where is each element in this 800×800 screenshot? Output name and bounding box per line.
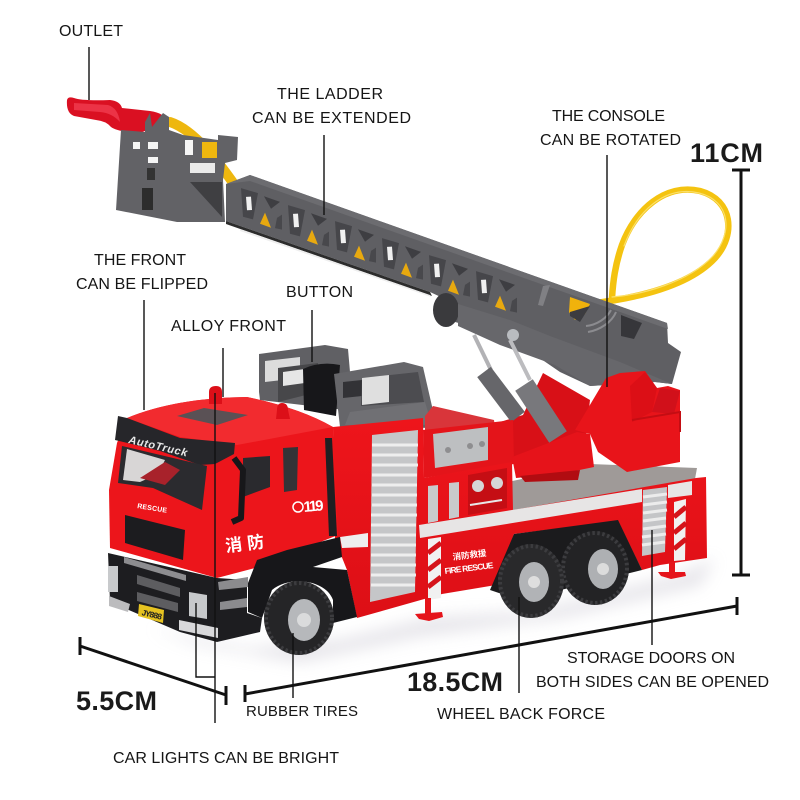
callout: alloy front: ALLOY FRONT — [171, 318, 286, 335]
ladder beam — [226, 175, 681, 386]
rear rail on cab — [259, 345, 350, 410]
deck grating — [425, 406, 495, 432]
dimension: width 5.5CM — [76, 637, 226, 716]
callout: wheel back force: WHEEL BACK FORCE — [437, 706, 605, 723]
rear grey deck — [508, 464, 697, 512]
side lettering: FIRE RESCUE — [444, 560, 494, 576]
callout: ladder — [252, 86, 411, 127]
wing mirror — [232, 458, 243, 522]
basket frame — [116, 113, 238, 222]
ladder truss openings — [226, 187, 517, 315]
license plate: JY888 — [140, 608, 163, 623]
side lettering: 消防救援 — [452, 548, 487, 562]
cab rear black strip — [325, 438, 337, 536]
license plate — [138, 604, 164, 623]
headlights — [108, 566, 207, 619]
ladder rear openings — [538, 285, 642, 339]
basket openings — [133, 140, 222, 217]
control panel — [433, 427, 488, 468]
small silver doors — [428, 482, 459, 523]
black visor — [115, 416, 235, 465]
hinge block — [433, 293, 459, 327]
black round button — [303, 364, 340, 416]
callout: car lights: CAR LIGHTS CAN BE BRIGHT — [113, 750, 339, 767]
storage door front — [370, 430, 418, 602]
upper equipment frame — [423, 420, 514, 478]
callout: front: THE FRONT — [94, 252, 186, 269]
ground shadow — [150, 558, 715, 662]
side lettering — [444, 548, 494, 576]
dimension: length 18.5CM — [245, 597, 737, 702]
warning stripes — [428, 499, 686, 600]
yellow water hose — [170, 122, 728, 304]
dimension: width 5.5CM: 5.5CM — [76, 686, 157, 716]
extending ladder — [226, 175, 681, 386]
callout leader lines — [89, 47, 652, 723]
RESCUE badge: RESCUE — [137, 503, 168, 515]
callout: storage doors — [536, 650, 769, 691]
cab shell — [109, 397, 338, 578]
hydraulic cylinders — [474, 335, 558, 437]
callout: storage doors: BOTH SIDES CAN BE OPENED — [536, 674, 769, 691]
front rail — [334, 362, 437, 428]
front wheel — [264, 581, 334, 655]
callout: ladder: THE LADDER — [277, 86, 383, 103]
bumper details — [109, 557, 248, 638]
black fender — [248, 537, 357, 623]
dimension: length 18.5CM: 18.5CM — [407, 667, 503, 697]
callout: rubber tires: RUBBER TIRES — [246, 703, 358, 720]
callout: ladder: CAN BE EXTENDED — [252, 110, 411, 127]
roof rails and button — [259, 345, 437, 428]
wheels — [498, 531, 629, 618]
rear wheel one — [498, 544, 564, 618]
number 119 badge: 119 — [303, 497, 324, 516]
Chinese cab lettering: 消防 — [224, 531, 265, 556]
basket with nozzle — [67, 97, 238, 222]
callout: storage doors: STORAGE DOORS ON — [567, 650, 735, 667]
rear wheel arch dark — [490, 520, 642, 600]
dimension: height 11CM — [690, 138, 763, 575]
callout: console: CAN BE ROTATED — [540, 132, 681, 149]
storage door rear — [642, 487, 667, 556]
beacons — [209, 386, 290, 419]
callout: button: BUTTON — [286, 284, 353, 301]
red water nozzle — [67, 97, 167, 133]
side body — [333, 418, 707, 618]
white side stripes — [340, 481, 692, 548]
roof hatch — [177, 408, 248, 425]
callout: front: CAN BE FLIPPED — [76, 276, 208, 293]
truck cab — [108, 386, 357, 655]
callout: front — [76, 252, 208, 293]
callout: console — [540, 108, 681, 149]
dimension: height 11CM: 11CM — [690, 138, 763, 168]
callout: outlet: OUTLET — [59, 23, 123, 40]
number 119 badge — [293, 497, 324, 516]
front grille — [125, 515, 185, 560]
console rear block — [500, 373, 590, 462]
red truck body — [333, 406, 707, 621]
door windows — [243, 447, 298, 497]
support feet — [415, 562, 686, 621]
dial panel — [468, 468, 507, 515]
windshield — [118, 446, 207, 510]
AutoTruck logo: AutoTruck — [126, 434, 189, 460]
rotating console — [512, 371, 680, 482]
callout: console: THE CONSOLE — [552, 108, 665, 125]
front bumper — [108, 553, 262, 642]
rear wheel two — [561, 531, 629, 605]
